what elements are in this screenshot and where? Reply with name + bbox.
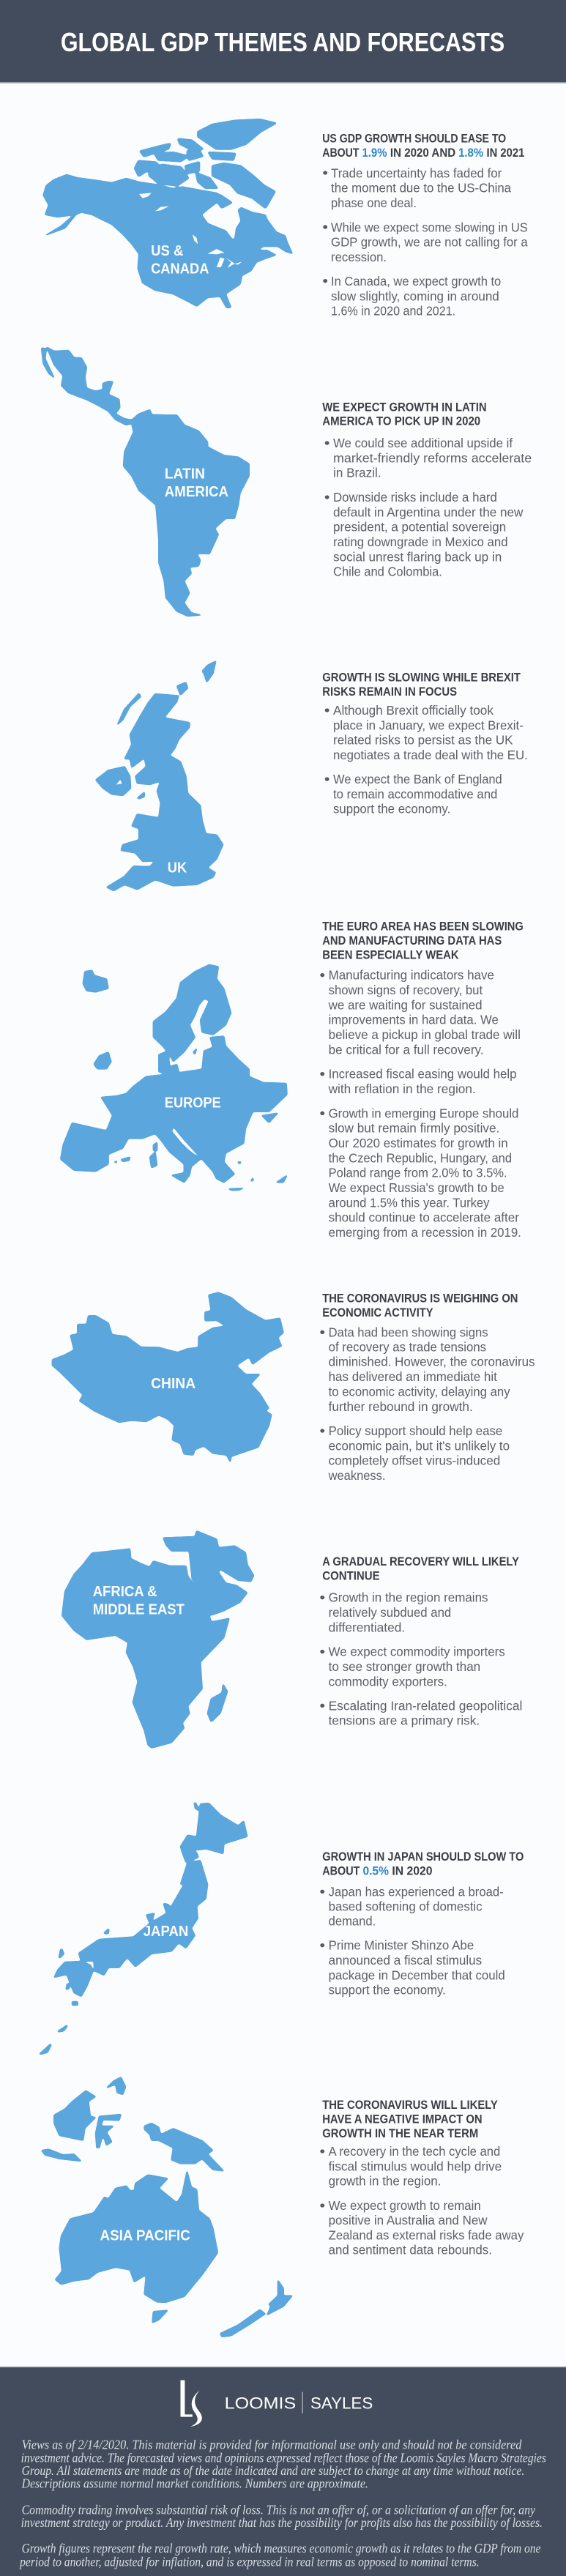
heading [322,131,524,160]
bullet list: Chile and Colombia. [333,564,442,578]
bullet list: Prime Minister Shinzo Abe [329,1937,474,1953]
heading: ABOUT [322,146,360,160]
heading: CONTINUE [322,1568,380,1582]
heading [322,1291,518,1319]
bullet list: we are waiting for sustained [328,997,483,1012]
panel: Europe [61,919,524,1240]
heading: 1.8% [458,146,483,160]
panel: UK [96,661,528,891]
heading [322,1555,519,1582]
heading: ABOUT [322,1864,360,1877]
panel: Japan [40,1803,524,2054]
map label: CANADA [151,259,209,277]
bullet list [320,1884,505,1998]
heading [322,2098,498,2140]
heading: 0.5% [362,1864,389,1877]
bullet list: growth in the region. [329,2173,441,2189]
footer panel [0,2367,566,2576]
bullet list: tensions are a primary risk. [329,1713,480,1728]
bullet list: announced a fiscal stimulus [329,1952,482,1968]
bullet list: recession. [331,249,387,264]
panel: Asia Pacific [42,2077,524,2337]
map label: JAPAN [144,1922,188,1940]
disclaimer text [19,2437,546,2569]
bullet list: 1.6% in 2020 and 2021. [331,303,455,319]
logo: Loomis Sayles: LOOMIS [225,2394,296,2412]
map label: MIDDLE EAST [93,1601,185,1618]
map label [151,242,209,277]
bullet list: support the economy. [333,801,450,816]
bullet list: differentiated. [329,1620,405,1634]
map label: AFRICA & [93,1582,157,1600]
logo: Loomis Sayles: SAYLES [310,2394,373,2412]
map label: AMERICA [165,483,228,500]
header banner [0,0,566,83]
bullet list [320,1325,535,1483]
heading [322,919,524,961]
bullet list [320,2143,524,2257]
bullet list [325,702,528,816]
panel: Latin America [42,347,532,617]
map: Europe [61,964,287,1191]
bullet list [323,165,528,319]
panel: China [52,1291,535,1483]
bullet list: We expect growth to remain [329,2197,481,2213]
heading: 1.9% [362,146,387,160]
heading: BEEN ESPECIALLY WEAK [322,948,459,961]
map: Japan [40,1803,247,2054]
heading [322,400,487,428]
panel: US and Canada [43,119,528,319]
bullet list: demand. [329,1913,376,1929]
bullet list [320,967,521,1240]
map: North America [43,119,292,308]
map label: US & [151,242,184,259]
heading: RISKS REMAIN IN FOCUS [322,685,457,699]
map: Asia Pacific [42,2077,292,2337]
bullet list: to see stronger growth than [329,1659,480,1674]
map: China [52,1292,283,1462]
bullet list: relatively subdued and [329,1604,451,1620]
heading: IN 2020 [392,1864,433,1877]
map label: ASIA PACIFIC [100,2227,190,2244]
map label: EUROPE [165,1094,221,1111]
lake [116,780,122,785]
map: Latin America [42,347,249,617]
heading [322,1850,524,1877]
bullet list [325,435,532,578]
logo: Loomis Sayles [180,2380,373,2427]
bullet list: commodity exporters. [329,1674,447,1689]
bullet list: based softening of domestic [329,1899,483,1914]
bullet list: weakness. [328,1467,386,1483]
bullet list: in Brazil. [333,465,381,480]
bullet list: support the economy. [329,1982,446,1998]
bullet list: phase one deal. [331,195,417,210]
bullet list: further rebound in growth. [329,1399,473,1414]
heading: IN 2020 AND [390,146,455,160]
bullet list [320,1590,522,1728]
map label [93,1582,185,1618]
bullet list: with reflation in the region. [328,1081,476,1096]
map label: LATIN [165,464,205,482]
map label: CHINA [151,1374,196,1392]
bullet list: be critical for a full recovery. [329,1042,484,1057]
panel: Africa and Middle East [62,1531,522,1748]
map: UK [96,661,223,891]
heading: IN 2021 [487,146,524,160]
map: Africa and Middle East [62,1531,254,1748]
map label: UK [168,858,187,876]
lakes [139,193,242,268]
map label [165,464,228,500]
heading: ECONOMIC ACTIVITY [322,1306,433,1319]
heading [322,670,521,699]
